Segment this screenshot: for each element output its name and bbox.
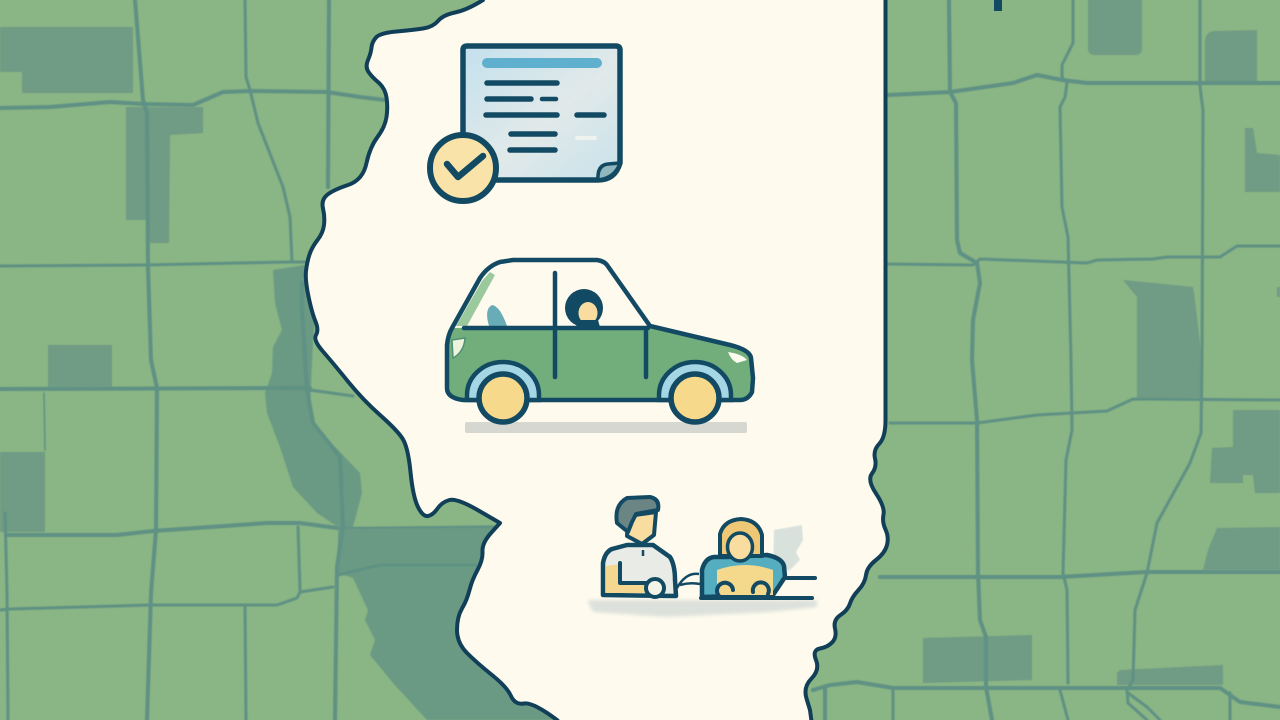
- ground shadow: [587, 600, 817, 617]
- student: [702, 519, 785, 597]
- icon: green car with driver: [447, 260, 753, 433]
- panel: Illinois state shape: [306, 0, 888, 720]
- top right mark: [994, 0, 1002, 11]
- document header bar: [482, 58, 602, 68]
- document corner fold: [598, 163, 620, 180]
- front wheel: [671, 374, 719, 422]
- background smudge: [773, 525, 803, 572]
- headlight: [728, 352, 747, 363]
- check badge: [430, 135, 496, 201]
- car body: [447, 326, 753, 400]
- document text lines: [486, 83, 604, 150]
- rear wheel: [479, 374, 527, 422]
- map: river: [265, 265, 570, 720]
- icon: document with check badge: [430, 46, 620, 201]
- car shadow: [465, 422, 747, 433]
- table lines: [701, 578, 815, 598]
- rear seat: [487, 305, 507, 326]
- instructor: [603, 497, 676, 597]
- icon: instructor and student: [587, 497, 817, 617]
- connecting line: [677, 574, 700, 588]
- rear window tint: [456, 272, 495, 326]
- rear wheel arch: [467, 362, 539, 400]
- document sheet: [463, 46, 620, 180]
- document faint highlight: [575, 136, 597, 140]
- car door lines: [464, 273, 648, 377]
- car outline: [447, 260, 753, 400]
- driver: [565, 289, 603, 327]
- front wheel arch: [659, 362, 731, 400]
- check mark: [447, 156, 483, 177]
- tail light: [452, 338, 465, 358]
